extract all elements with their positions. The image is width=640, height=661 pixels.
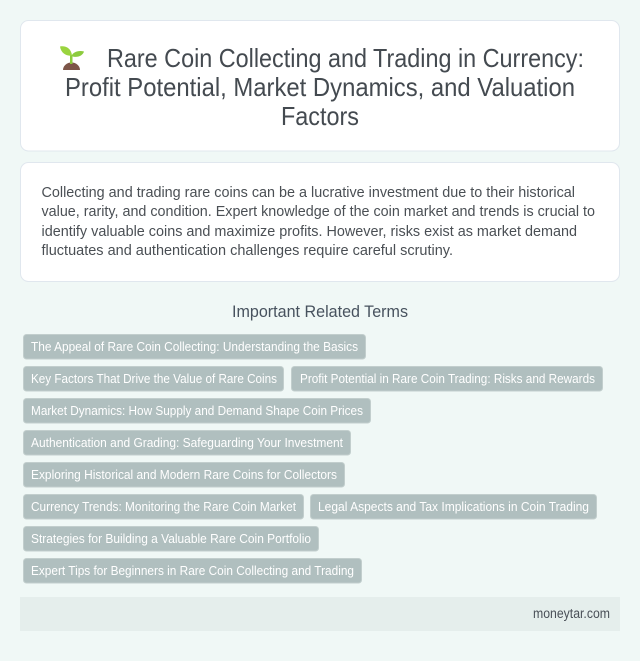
tag: legal aspects [310,494,596,519]
tag: key factors [24,366,284,391]
tag: authentication [24,430,350,455]
title: Rare Coin Collecting and Trading in Currency: [107,43,584,73]
summary text [42,184,595,259]
summary text: fluctuates and authentication challenges require careful scrutiny. [42,242,453,259]
title: Profit Potential, Market Dynamics, and Valuation [65,72,575,102]
tag: strategies: Strategies for Building a Valuable Rare Coin Portfolio [31,531,311,546]
footer [20,597,620,631]
tag: market dynamics [24,398,370,423]
tag: profit potential: Profit Potential in Rare Coin Trading: Risks and Rewards [300,371,595,386]
tag: appeal: The Appeal of Rare Coin Collecting: Understanding the Basics [31,339,358,354]
tag: exploring [24,462,344,487]
title: Factors [281,101,359,131]
heading: important related terms: Important Related Terms [232,303,408,321]
icon: sprout [60,46,84,70]
tag: currency trends [24,494,304,519]
footer source text: moneytar.com [533,606,610,621]
tag: strategies [24,526,318,551]
tag: exploring: Exploring Historical and Modern Rare Coins for Collectors [31,467,337,482]
summary text: identify valuable coins and maximize profits. However, risks exist as market demand [42,223,577,240]
tag: expert tips [24,558,362,583]
title [65,43,584,131]
tag: expert tips: Expert Tips for Beginners in Rare Coin Collecting and Trading [31,563,354,578]
summary text: Collecting and trading rare coins can be a lucrative investment due to their historical [42,184,575,201]
tag: market dynamics: Market Dynamics: How Supply and Demand Shape Coin Prices [31,403,363,418]
panel: title card [20,20,620,151]
panel: summary card [20,162,620,282]
summary text: value, rarity, and condition. Expert knowledge of the coin market and trends is crucial to [42,203,595,220]
tag: appeal [24,334,366,359]
tag: legal aspects: Legal Aspects and Tax Implications in Coin Trading [318,499,589,514]
tag: authentication: Authentication and Grading: Safeguarding Your Investment [31,435,343,450]
tag: currency trends: Currency Trends: Monitoring the Rare Coin Market [31,499,296,514]
tag: key factors: Key Factors That Drive the Value of Rare Coins [31,371,277,386]
tag: profit potential [292,366,602,391]
tag list [24,334,602,583]
